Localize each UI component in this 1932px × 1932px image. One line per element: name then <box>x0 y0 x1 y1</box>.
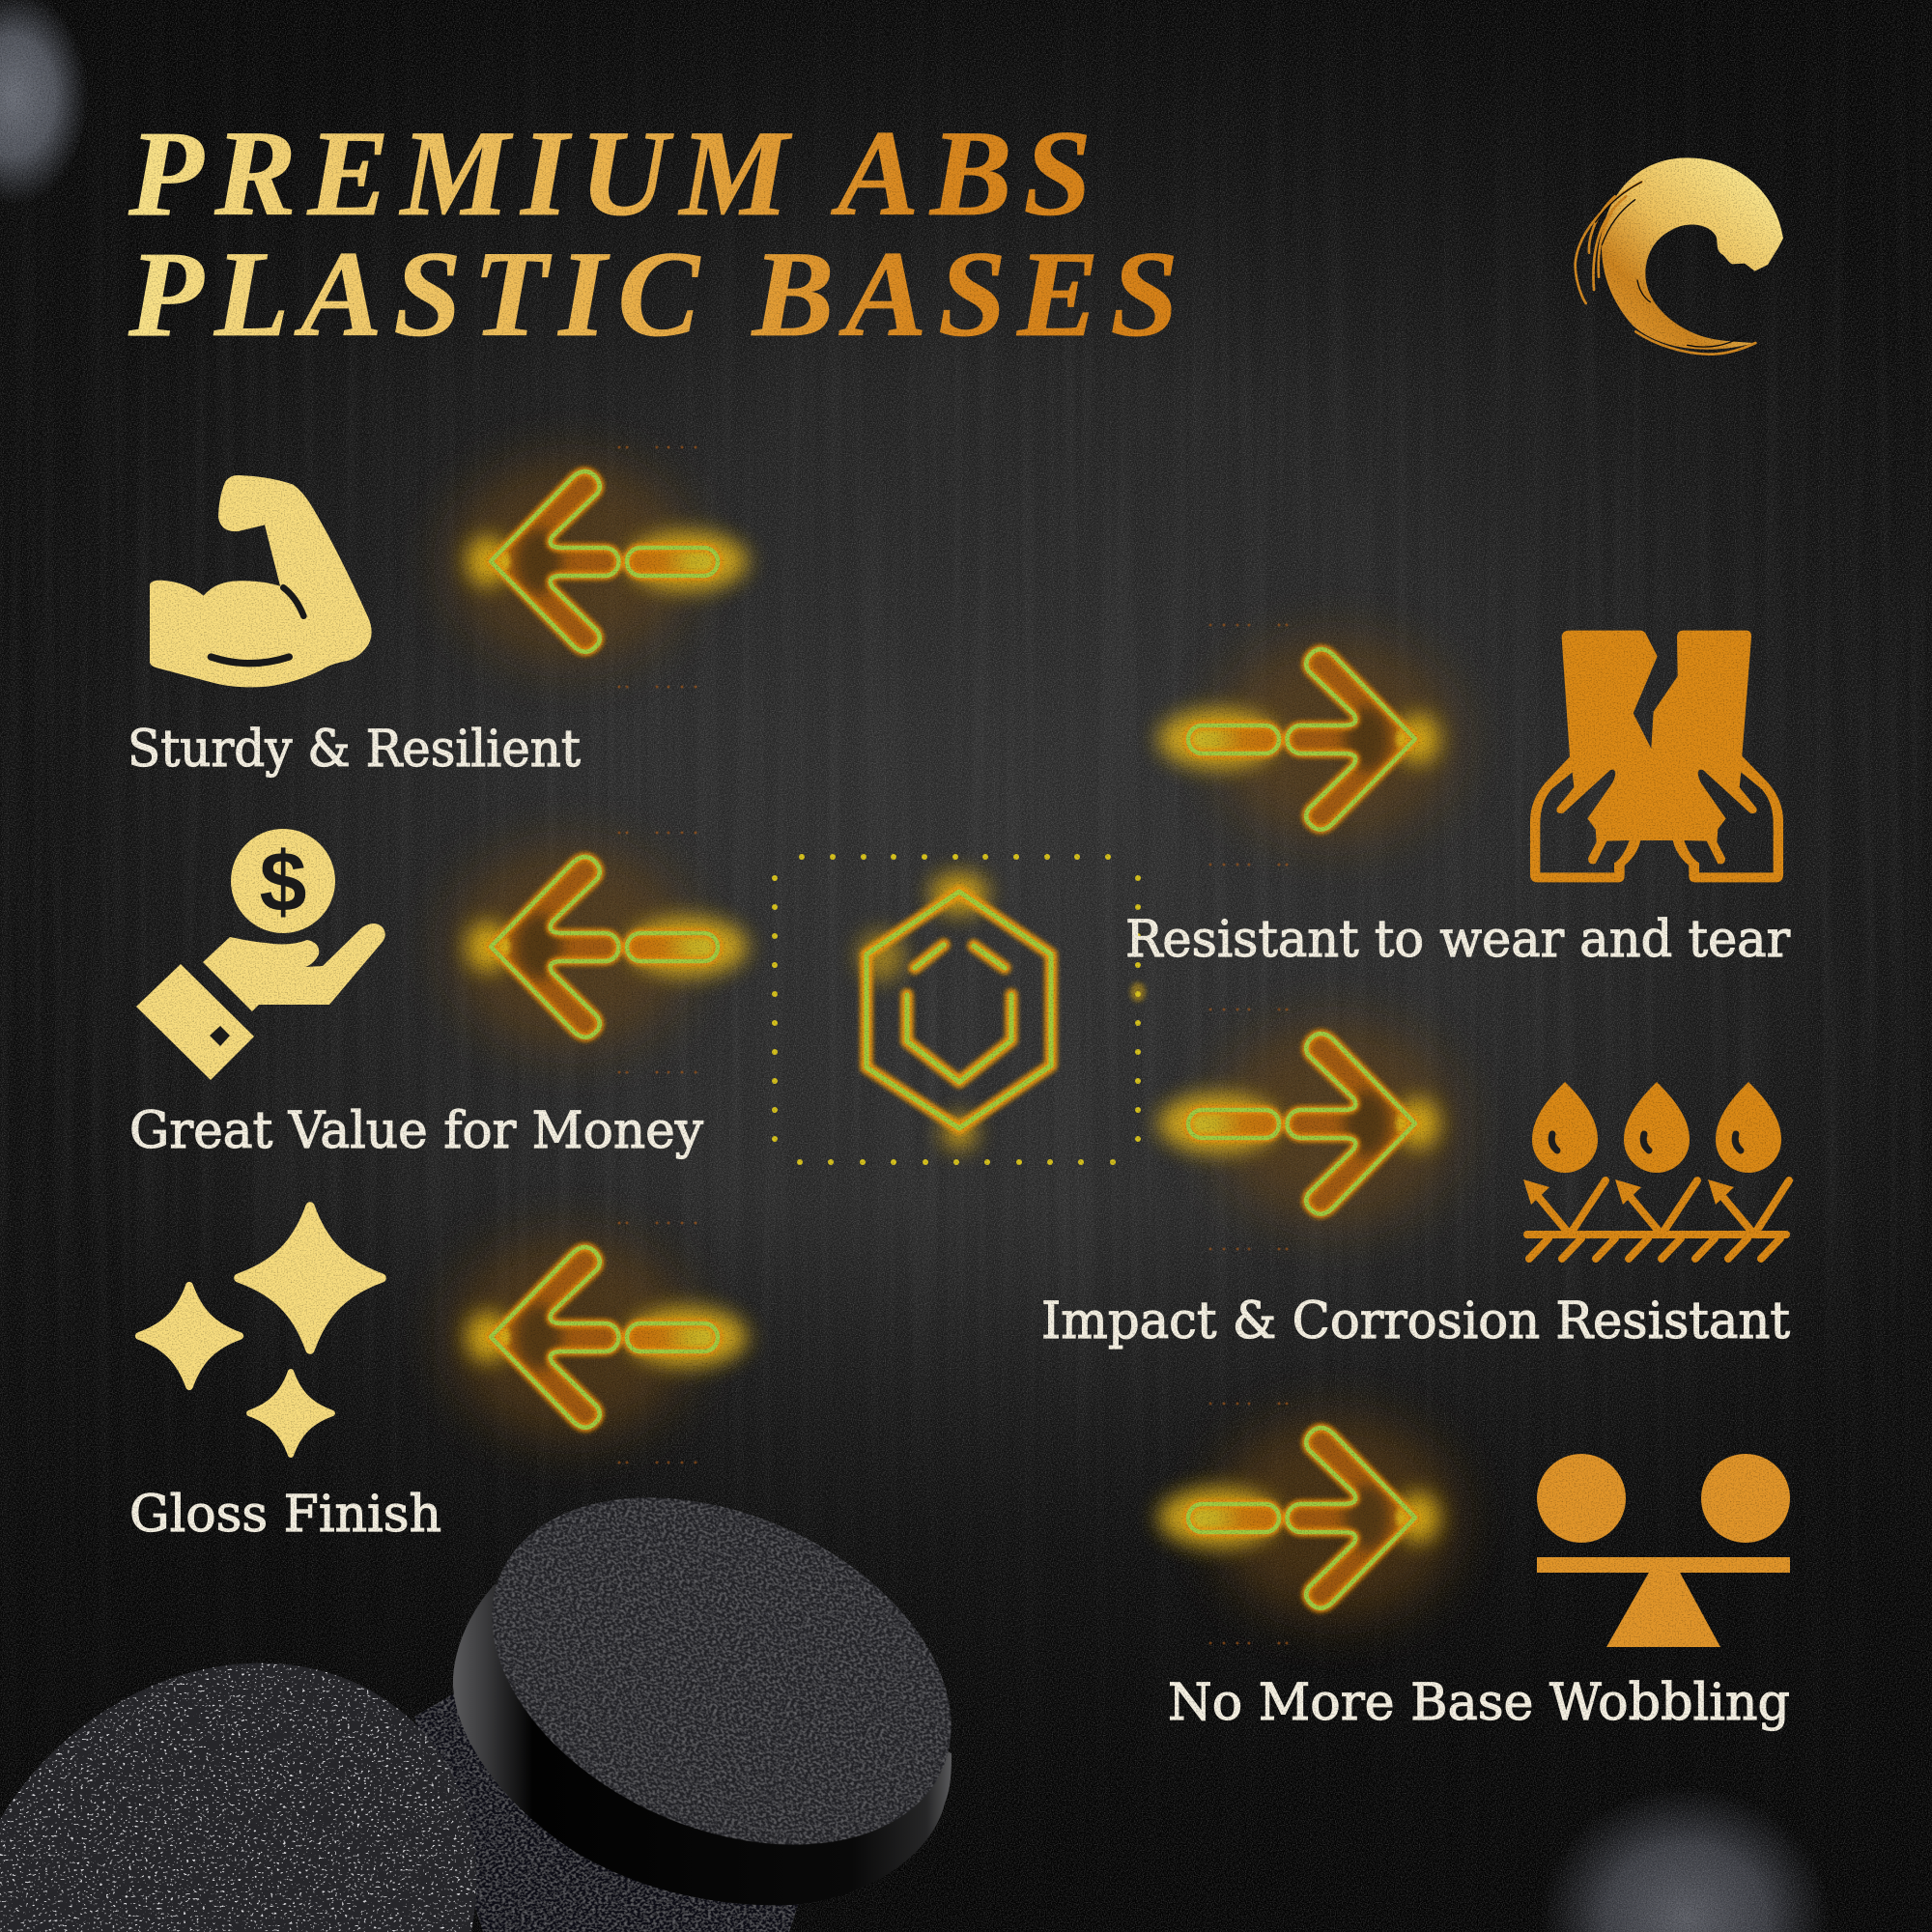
icon: hand with coin: $ <box>260 834 306 929</box>
label: value: Great Value for Money <box>129 1102 704 1160</box>
title: PREMIUM ABS <box>128 106 1092 242</box>
label: wobbling: No More Base Wobbling <box>1168 1674 1790 1732</box>
icon: balance <box>1537 1454 1790 1647</box>
label: gloss: Gloss Finish <box>129 1486 441 1544</box>
rear base side wall <box>453 1584 952 1905</box>
label: wear and tear: Resistant to wear and tear <box>1125 911 1790 969</box>
rear base face <box>438 1430 1006 1913</box>
icon: gold brush circle logo <box>1576 157 1783 355</box>
icon: hands tearing material <box>1530 631 1783 882</box>
icon: drops and deflecting surface <box>1523 1082 1789 1259</box>
arrow: neon left 2 <box>449 831 748 1074</box>
arrow: neon left 1 <box>449 446 748 688</box>
icon: flexed arm <box>150 475 372 687</box>
center hexagon emblem with dotted frame <box>772 854 1146 1165</box>
front base face <box>0 1663 477 1932</box>
arrow: neon right 2 <box>1158 1009 1457 1250</box>
icon: hand with coin <box>136 829 385 1080</box>
arrow: neon left 3 <box>449 1221 748 1464</box>
label: sturdy: Sturdy & Resilient <box>128 721 581 779</box>
arrow: neon right 3 <box>1158 1403 1457 1644</box>
arrow: neon right 1 <box>1158 624 1457 866</box>
middle base body <box>414 1693 802 1932</box>
product photo: black round bases <box>0 1497 952 1932</box>
panel: right benefits <box>1041 631 1790 1732</box>
label: impact: Impact & Corrosion Resistant <box>1041 1293 1790 1350</box>
title: PLASTIC BASES <box>128 227 1179 362</box>
title <box>128 106 1179 362</box>
icon: sparkles <box>139 1207 382 1455</box>
panel: left benefits <box>128 475 704 1544</box>
